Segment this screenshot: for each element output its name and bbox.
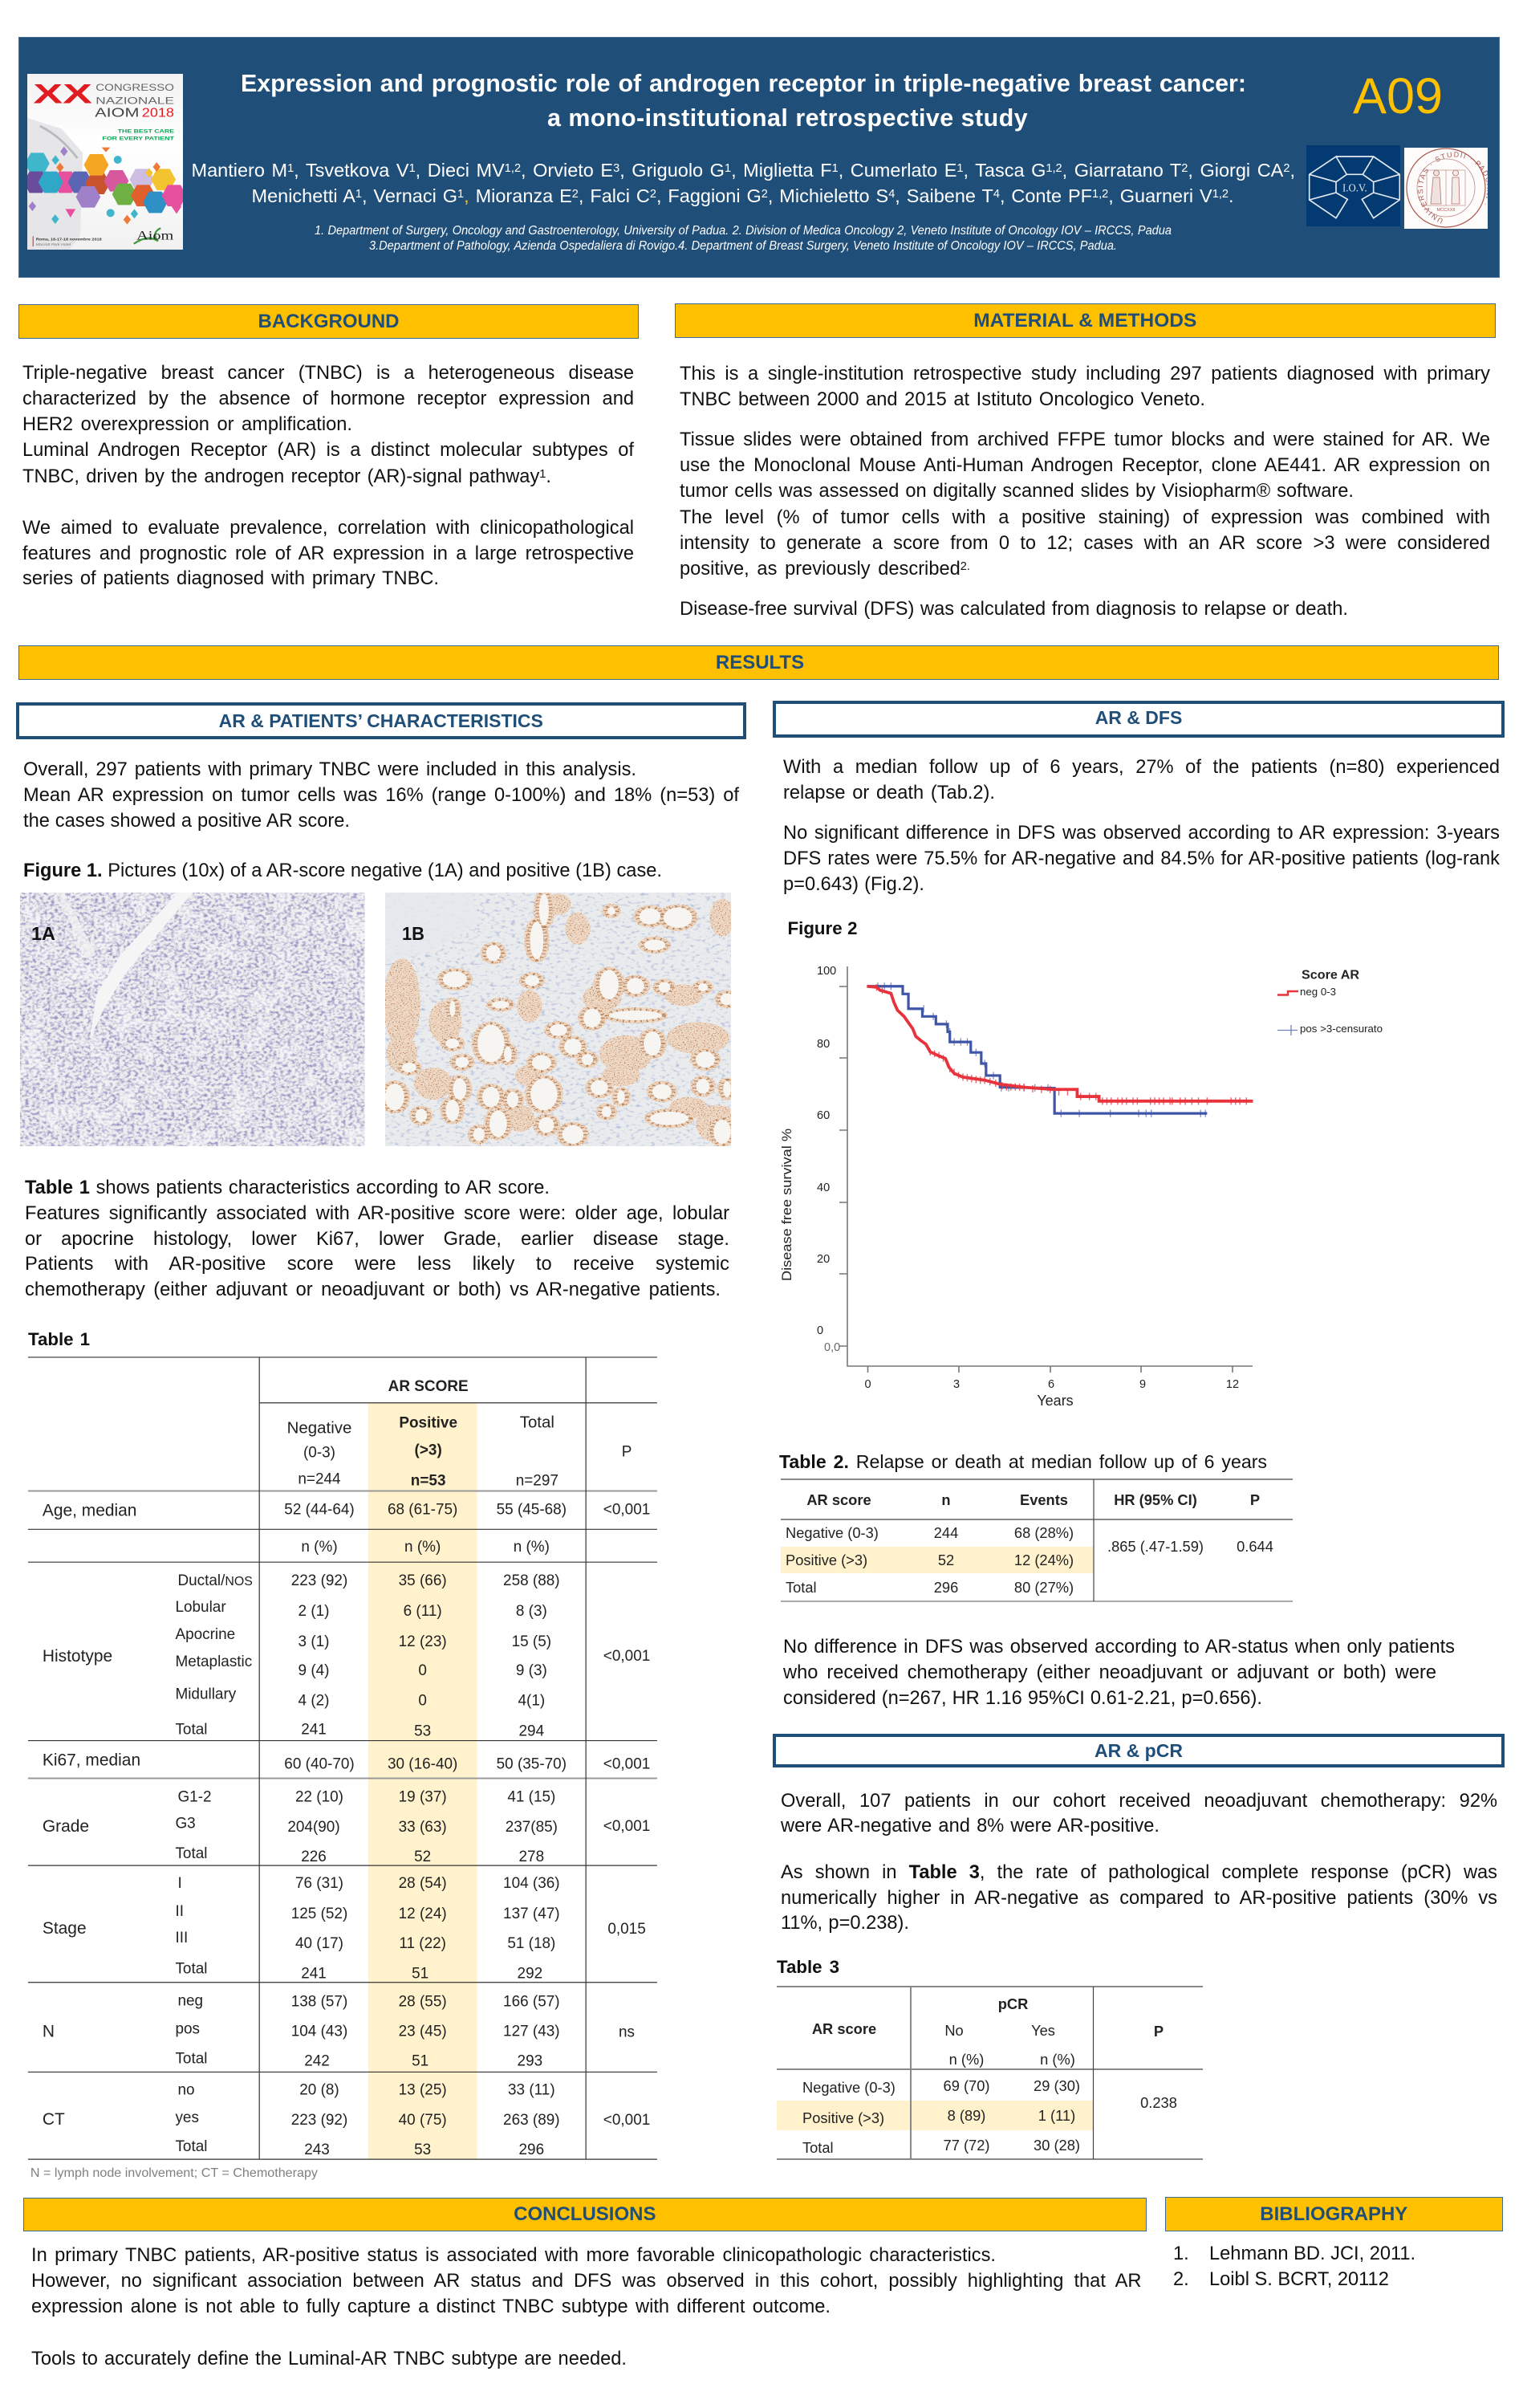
- rows: stage: 40 (17): [295, 1935, 343, 1952]
- text: DFS in chemotherapy subgroup: [783, 1636, 1454, 1709]
- logo: AIOM 2018 congress poster: [27, 74, 183, 250]
- rows: stage: 76 (31): [295, 1875, 343, 1892]
- text: material and methods: Disease-free survival (DFS) was calculated from diagnosis to relapse or death.: [680, 598, 1348, 620]
- rows: grade: [43, 1788, 650, 1865]
- table 2 rows: 12 (24%): [1014, 1552, 1074, 1568]
- table 3 rows: 69 (70): [944, 2077, 989, 2094]
- logo: AIOM 2018 congress poster: XX: [33, 79, 92, 110]
- rows: histotype: 12 (23): [399, 1633, 447, 1650]
- rows: stage: I: [177, 1875, 182, 1892]
- panel heading: AR and pCR: [773, 1734, 1505, 1767]
- rows: stage: 12 (24): [399, 1906, 447, 1922]
- rows: CT: [43, 2081, 650, 2158]
- text: patients overview: Figure 1. Pictures (10x) of a AR-score negative (1A) and positive (1B) case.: [23, 860, 662, 881]
- header row: n=297: [516, 1472, 558, 1489]
- rows: histotype: 53: [414, 1723, 431, 1740]
- rows: histotype: Apocrine: [175, 1626, 235, 1643]
- rows: stage: 292: [518, 1966, 542, 1983]
- rows: stage: Stage: [43, 1919, 87, 1938]
- heading: table 3: Table 3: [777, 1957, 839, 1977]
- rows: stage: [43, 1875, 646, 1983]
- rows: grade: 226: [301, 1849, 327, 1865]
- logo: AIOM 2018 congress poster: FOR EVERY PATIENT: [102, 136, 174, 141]
- text: bibliography: [1173, 2243, 1415, 2290]
- rows: N: 242: [304, 2052, 330, 2069]
- table 3 rows: 1 (11): [1038, 2107, 1075, 2124]
- table 3 header: [812, 1995, 1164, 2068]
- rows: stage: III: [175, 1930, 188, 1946]
- rows: grade: 204(90): [287, 1819, 340, 1836]
- y tick labels: 100: [817, 965, 836, 978]
- rows: grade: <0,001: [603, 1818, 650, 1835]
- table 2 rows: 80 (27%): [1014, 1579, 1074, 1596]
- rows: histotype: Lobular: [175, 1599, 226, 1616]
- heading bar: bibliography: [1165, 2197, 1503, 2231]
- text: background: characterized by the absence of hormone receptor expression and: [22, 388, 634, 409]
- text: AR and pCR: As shown in Table 3, the rate of pathological complete response (pCR) was: [781, 1861, 1497, 1883]
- rows: grade: Grade: [43, 1817, 89, 1836]
- rows: grade: G1-2: [177, 1788, 212, 1805]
- text: conclusions: [31, 2244, 1141, 2369]
- rows: histotype: 4 (2): [299, 1693, 329, 1710]
- text: AR and DFS: No significant difference in DFS was observed according to AR expression: 3-years: [783, 822, 1500, 844]
- table 3 header: pCR: [998, 1995, 1028, 2012]
- rows: histotype: 9 (3): [516, 1662, 547, 1679]
- rows: histotype: 3 (1): [299, 1633, 329, 1650]
- rows: stage: 51 (18): [507, 1935, 555, 1952]
- x tick labels: [864, 1378, 1239, 1391]
- heading: figure 2: Figure 2: [788, 918, 857, 938]
- rows: grade: 19 (37): [399, 1788, 447, 1805]
- header row: (>3): [415, 1442, 442, 1459]
- rows: stage: 51: [412, 1966, 428, 1983]
- label: 1A: 1A: [31, 923, 55, 944]
- table 3 rows: [802, 2077, 1177, 2156]
- table 3 header: P: [1154, 2023, 1164, 2040]
- rows: histotype: 223 (92): [291, 1572, 347, 1589]
- text: DFS in chemotherapy subgroup: considered (n=267, HR 1.16 95%CI 0.61-2.21, p=0.656).: [783, 1687, 1261, 1709]
- logo: AIOM 2018 congress poster: Roma, 16-17-18 novembre 2018: [36, 237, 102, 242]
- legend: pos >3-censurato: [1300, 1023, 1383, 1035]
- y tick labels: 40: [817, 1182, 830, 1194]
- logo: University of Padua seal: MCCXXII: [1437, 208, 1456, 213]
- row: units: n (%): [404, 1539, 441, 1556]
- rows: N: 23 (45): [399, 2024, 447, 2040]
- rows: N: 166 (57): [503, 1994, 560, 2011]
- rows: histotype: Metaplastic: [175, 1653, 252, 1670]
- text: table 1 summary: Patients with AR-positive score were less likely to receive systemic: [25, 1253, 729, 1275]
- table 2 rows: 52: [938, 1552, 954, 1568]
- text: conclusions: However, no significant association between AR status and DFS was observed in this cohort, possibly highlighting that AR: [31, 2270, 1141, 2292]
- x tick labels: 3: [953, 1378, 960, 1391]
- table 3: pCR by AR score: [777, 1986, 1203, 2160]
- rows: stage: 104 (36): [503, 1875, 560, 1892]
- logo: AIOM 2018 congress poster: THE BEST CARE: [118, 129, 175, 135]
- text: table 1 summary: chemotherapy (either adjuvant or neoadjuvant or both) vs AR-negative patients.: [25, 1279, 721, 1300]
- table 3 rows: Positive (>3): [802, 2109, 884, 2126]
- rows: histotype: Midullary: [175, 1686, 237, 1703]
- image 1B: AR-positive histology: [385, 893, 731, 1146]
- header row: Total: [520, 1413, 554, 1432]
- y tick labels: 0,0: [824, 1341, 840, 1354]
- text: material and methods: The level (% of tumor cells with a positive staining) of expression was combined with: [680, 506, 1490, 528]
- row: Ki67: [43, 1751, 650, 1772]
- row: age: 52 (44-64): [284, 1501, 355, 1518]
- table 3 rows: 29 (30): [1034, 2077, 1080, 2094]
- rows: stage: 137 (47): [503, 1906, 560, 1922]
- title: [241, 70, 1246, 132]
- table 2 rows: [786, 1524, 1273, 1596]
- table 2 header: Events: [1020, 1491, 1068, 1508]
- heading bar: material and methods: MATERIAL & METHODS: [973, 310, 1196, 331]
- panel heading: AR and DFS: [773, 701, 1505, 738]
- logo: IOV: I.O.V.: [1342, 182, 1367, 194]
- x axis title: Years: [1037, 1393, 1074, 1409]
- text: conclusions: expression alone is not able to fully capture a distinct TNBC subtype with different outcome.: [31, 2296, 831, 2317]
- x tick labels: 0: [864, 1378, 871, 1391]
- chart: Kaplan-Meier disease free survival by AR score: [779, 965, 1383, 1409]
- row: units: n (%): [301, 1539, 338, 1556]
- table 3 rows: 8 (89): [948, 2107, 985, 2124]
- table 3 header: n (%): [949, 2051, 984, 2068]
- rows: N: 293: [518, 2052, 542, 2069]
- table 2 rows: .865 (.47-1.59): [1107, 1538, 1204, 1555]
- rows: N: pos: [175, 2021, 200, 2038]
- heading bar: conclusions: CONCLUSIONS: [514, 2203, 656, 2225]
- table 2 rows: Negative (0-3): [786, 1524, 879, 1541]
- text: DFS in chemotherapy subgroup: who received chemotherapy (either neoadjuvant or adjuvant or both) were: [783, 1662, 1436, 1683]
- rows: N: neg: [177, 1993, 203, 2010]
- logo: AIOM 2018 congress poster: CONGRESSO: [95, 82, 174, 93]
- y tick labels: 80: [817, 1038, 830, 1051]
- row: age: Age, median: [43, 1501, 136, 1519]
- rows: CT: 243: [304, 2142, 330, 2158]
- rows: histotype: 0: [418, 1662, 427, 1679]
- affiliations: 3.Department of Pathology, Azienda Ospedaliera di Rovigo.4. Department of Breast Surgery, Veneto Institute of Oncology IOV – IRCCS, Padua.: [369, 239, 1117, 253]
- affiliations: [315, 224, 1172, 253]
- text: bibliography: Loibl S. BCRT, 20112: [1209, 2268, 1389, 2290]
- rows: CT: Total: [175, 2138, 207, 2155]
- rows: stage: 28 (54): [399, 1875, 447, 1892]
- header row: AR SCORE: [388, 1378, 469, 1395]
- rows: stage: 125 (52): [291, 1906, 347, 1922]
- text: AR and pCR: 11%, p=0.238).: [781, 1912, 909, 1934]
- table 2 rows: 244: [934, 1524, 958, 1541]
- header row: Positive: [399, 1415, 457, 1432]
- table 2 rows: 68 (28%): [1014, 1524, 1074, 1541]
- table 2 rows: Positive (>3): [786, 1552, 867, 1568]
- rows: histotype: 241: [301, 1722, 327, 1739]
- row: age: 55 (45-68): [497, 1501, 567, 1518]
- text: AR and pCR: [781, 1790, 1497, 1934]
- text: material and methods: use the Monoclonal Mouse Anti-Human Androgen Receptor, clone AE441. AR expression on: [680, 454, 1490, 476]
- table 2 header: n: [941, 1491, 951, 1508]
- rows: histotype: Ductal/NOS: [177, 1572, 253, 1589]
- logo: AIOM 2018 congress poster: 2018: [142, 107, 174, 120]
- rows: histotype: 258 (88): [503, 1572, 560, 1589]
- text: AR and pCR: numerically higher in AR-negative as compared to AR-positive patients (30% vs: [781, 1887, 1497, 1909]
- rows: histotype: 2 (1): [299, 1603, 329, 1620]
- rows: histotype: 35 (66): [399, 1572, 447, 1589]
- rows: CT: 13 (25): [399, 2081, 447, 2098]
- logo: IOV: [1306, 145, 1400, 226]
- text: table 1 summary: Features significantly associated with AR-positive score were: older age, lobular: [25, 1202, 729, 1224]
- rows: grade: 237(85): [506, 1819, 558, 1836]
- heading bar: results: RESULTS: [716, 652, 804, 673]
- rows: CT: 20 (8): [299, 2081, 339, 2098]
- rows: grade: 22 (10): [295, 1788, 343, 1805]
- row: Ki67: Ki67, median: [43, 1751, 140, 1769]
- row: Ki67: <0,001: [603, 1755, 650, 1772]
- table 2: relapse or death: [781, 1479, 1293, 1602]
- rows: histotype: <0,001: [603, 1648, 650, 1665]
- text: material and methods: positive, as previously described2.: [680, 558, 970, 580]
- logo: AIOM 2018 congress poster: Aiom: [136, 230, 174, 243]
- table 3 header: AR score: [812, 2020, 876, 2037]
- text: material and methods: This is a single-institution retrospective study including 297 patients diagnosed with primary: [680, 363, 1490, 384]
- row: age: [43, 1501, 650, 1519]
- panel heading: AR and DFS: AR & DFS: [1095, 706, 1182, 727]
- authors: [191, 160, 1295, 206]
- rows: CT: 33 (11): [508, 2081, 555, 2098]
- row: units: n (%): [514, 1539, 550, 1556]
- row: age: <0,001: [603, 1501, 650, 1518]
- table 2 header: HR (95% CI): [1114, 1491, 1197, 1508]
- rows: N: 138 (57): [291, 1994, 347, 2011]
- heading bar: conclusions: [23, 2198, 1147, 2231]
- logo: AIOM 2018 congress poster: Marriott Park Hotel: [36, 242, 71, 246]
- heading bar: background: [18, 304, 639, 339]
- rows: CT: 53: [414, 2142, 431, 2158]
- text: conclusions: Tools to accurately define the Luminal-AR TNBC subtype are needed.: [31, 2348, 627, 2369]
- text: bibliography: Lehmann BD. JCI, 2011.: [1209, 2243, 1415, 2264]
- text: patients overview: Mean AR expression on tumor cells was 16% (range 0-100%) and 18% (n=53) of: [23, 784, 739, 806]
- rows: CT: 296: [519, 2142, 544, 2158]
- rows: histotype: 0: [418, 1693, 427, 1710]
- table 3 rows: 0.238: [1140, 2094, 1177, 2111]
- text: bibliography: 1.: [1173, 2243, 1189, 2264]
- text: background: TNBC, driven by the androgen receptor (AR)-signal pathway1.: [22, 466, 551, 487]
- affiliations: 1. Department of Surgery, Oncology and Gastroenterology, University of Padua. 2. Division of Medica Oncology 2, Veneto Institute of Oncology IOV – IRCCS, Padua: [315, 224, 1172, 238]
- text: background: Triple-negative breast cancer (TNBC) is a heterogeneous disease: [22, 362, 634, 384]
- rows: histotype: 9 (4): [299, 1662, 329, 1679]
- rows: histotype: 8 (3): [516, 1603, 547, 1620]
- authors: Mantiero M1, Tsvetkova V1, Dieci MV1,2, Orvieto E3, Griguolo G1, Miglietta F1, Cumerlato E1, Tasca G1,2, Giarratano T2, Giorgi CA2,: [191, 160, 1295, 181]
- text: AR and pCR: Overall, 107 patients in our cohort received neoadjuvant chemotherapy: 92%: [781, 1790, 1497, 1812]
- text: background: series of patients diagnosed with primary TNBC.: [22, 567, 439, 589]
- table 2 rows: 0.644: [1237, 1538, 1273, 1555]
- text: AR and DFS: [783, 756, 1500, 895]
- logo: AIOM 2018 congress poster: NAZIONALE: [95, 95, 174, 106]
- text: patients overview: the cases showed a positive AR score.: [23, 810, 350, 832]
- text: bibliography: 2.: [1173, 2268, 1189, 2290]
- rows: grade: 33 (63): [399, 1819, 447, 1836]
- table 3 rows: Negative (0-3): [802, 2079, 896, 2096]
- text: background: Luminal Androgen Receptor (AR) is a distinct molecular subtypes of: [22, 439, 634, 461]
- rows: N: N: [43, 2023, 55, 2041]
- table 1: patient characteristics by AR score: [27, 1357, 657, 2180]
- header row: (0-3): [303, 1445, 335, 1462]
- image 1A: AR-negative histology: [20, 893, 364, 1146]
- rows: CT: 223 (92): [291, 2112, 347, 2129]
- row: units: [301, 1539, 550, 1556]
- authors: Menichetti A1, Vernaci G1, Mioranza E2, Falci C2, Faggioni G2, Michieletto S4, Saibene T4, Conte PF1,2, Guarneri V1,2.: [252, 185, 1234, 206]
- panel heading: AR and pCR: AR & pCR: [1095, 1740, 1183, 1761]
- text: AR and pCR: were AR-negative and 8% were AR-positive.: [781, 1815, 1160, 1837]
- table 3 rows: Total: [802, 2139, 834, 2156]
- text: background: features and prognostic role of AR expression in a large retrospective: [22, 543, 634, 564]
- rows: N: 51: [412, 2052, 428, 2069]
- label: 1B: 1B: [401, 923, 424, 944]
- rows: histotype: Total: [175, 1722, 207, 1739]
- text: conclusions: In primary TNBC patients, AR-positive status is associated with more favorable clinicopathologic characteristics.: [31, 2244, 996, 2266]
- footnote: N = lymph node involvement; CT = Chemotherapy: [30, 2166, 318, 2180]
- rows: grade: G3: [175, 1815, 196, 1832]
- rows: histotype: 4(1): [518, 1693, 545, 1710]
- text: DFS in chemotherapy subgroup: No difference in DFS was observed according to AR-status when only patients: [783, 1636, 1454, 1658]
- panel heading: AR and patients characteristics: AR & PATIENTS’ CHARACTERISTICS: [219, 710, 543, 730]
- legend: [1277, 968, 1383, 1035]
- rows: N: Total: [175, 2050, 207, 2067]
- text: background: HER2 overexpression or amplification.: [22, 413, 352, 435]
- x tick labels: 12: [1226, 1378, 1239, 1391]
- x tick labels: 6: [1048, 1378, 1054, 1391]
- text: table 1 summary: Table 1 shows patients characteristics according to AR score.: [25, 1177, 550, 1198]
- text: patients overview: [23, 759, 739, 881]
- table 3 header: Yes: [1031, 2022, 1055, 2039]
- text: background: We aimed to evaluate prevalence, correlation with clinicopathological: [22, 517, 634, 539]
- table 2 header: AR score: [806, 1491, 871, 1508]
- text: table 1 summary: [25, 1177, 729, 1300]
- rows: stage: II: [175, 1903, 184, 1920]
- rows: stage: 0,015: [607, 1921, 646, 1938]
- rows: CT: CT: [43, 2110, 65, 2129]
- row: Ki67: 50 (35-70): [497, 1755, 567, 1772]
- heading bar: background: BACKGROUND: [258, 310, 400, 332]
- rows: N: ns: [619, 2024, 635, 2041]
- rows: grade: Total: [175, 1845, 207, 1862]
- rows: grade: 52: [414, 1849, 431, 1865]
- y tick labels: 20: [817, 1253, 830, 1266]
- legend: Score AR: [1302, 968, 1359, 982]
- table 2 rows: Total: [786, 1579, 817, 1596]
- rows: histotype: Histotype: [43, 1647, 112, 1666]
- rows: CT: no: [177, 2081, 195, 2098]
- x tick labels: 9: [1139, 1378, 1146, 1391]
- curve: AR negative: [867, 984, 1253, 1104]
- rows: stage: Total: [175, 1961, 207, 1978]
- table 2 header: P: [1250, 1491, 1260, 1508]
- header row: Negative: [287, 1419, 351, 1438]
- row: age: 68 (61-75): [388, 1501, 457, 1518]
- rows: CT: yes: [175, 2109, 199, 2126]
- text: table 1 summary: or apocrine histology, lower Ki67, lower Grade, earlier disease stage.: [25, 1228, 729, 1250]
- rows: stage: 11 (22): [399, 1935, 446, 1952]
- heading bar: material and methods: [675, 303, 1496, 338]
- text: AR and DFS: DFS rates were 75.5% for AR-negative and 84.5% for AR-positive patients (log-rank: [783, 848, 1500, 869]
- panel heading: AR and patients characteristics: [16, 702, 746, 739]
- axes: [839, 966, 1253, 1373]
- y tick labels: 60: [817, 1109, 830, 1122]
- row: Ki67: 60 (40-70): [284, 1755, 355, 1772]
- header row: n=53: [411, 1472, 446, 1489]
- rows: N: 127 (43): [503, 2024, 560, 2040]
- header row: n=244: [298, 1470, 341, 1487]
- y axis title: Disease free survival %: [779, 1129, 794, 1281]
- rows: histotype: 294: [519, 1723, 544, 1740]
- rows: histotype: [43, 1572, 650, 1740]
- header row: P: [622, 1444, 632, 1461]
- heading bar: results: [18, 645, 1499, 680]
- text: material and methods: TNBC between 2000 and 2015 at Istituto Oncologico Veneto.: [680, 388, 1205, 410]
- table 3 rows: 30 (28): [1034, 2137, 1080, 2154]
- logo: AIOM 2018 congress poster: AIOM: [95, 107, 139, 120]
- table 2 title: Table 2. Relapse or death at median follow up of 6 years: [779, 1451, 1267, 1472]
- rows: stage: 241: [301, 1966, 327, 1983]
- rows: N: [43, 1993, 635, 2069]
- table 2 header: [806, 1491, 1260, 1508]
- table 2 rows: 296: [934, 1579, 958, 1596]
- title: Expression and prognostic role of androgen receptor in triple-negative breast cancer:: [241, 70, 1246, 97]
- rows: grade: 278: [519, 1849, 544, 1865]
- table 3 header: No: [944, 2022, 964, 2039]
- rows: histotype: 15 (5): [512, 1633, 551, 1650]
- text: AR and DFS: p=0.643) (Fig.2).: [783, 873, 924, 895]
- rows: N: 28 (55): [399, 1994, 447, 2011]
- y tick labels: [817, 965, 840, 1354]
- table 3 header: n (%): [1040, 2051, 1075, 2068]
- text: material and methods: intensity to generate a score from 0 to 12; cases with an AR score >3 were considered: [680, 532, 1490, 554]
- heading bar: bibliography: BIBLIOGRAPHY: [1260, 2203, 1407, 2225]
- rows: grade: 41 (15): [507, 1788, 555, 1805]
- text: material and methods: tumor cells was assessed on digitally scanned slides by Visiopharm® software.: [680, 480, 1354, 502]
- row: Ki67: 30 (16-40): [388, 1755, 457, 1772]
- rows: CT: 263 (89): [503, 2112, 560, 2129]
- curve: AR positive: [867, 982, 1207, 1117]
- text: background: [22, 362, 634, 589]
- text: material and methods: [680, 363, 1490, 620]
- header row: [287, 1378, 632, 1489]
- rows: N: 104 (43): [291, 2024, 347, 2040]
- y tick labels: 0: [817, 1324, 823, 1337]
- poster code A09: A09: [1353, 68, 1443, 124]
- text: AR and DFS: relapse or death (Tab.2).: [783, 782, 995, 803]
- text: patients overview: Overall, 297 patients with primary TNBC were included in this analysis.: [23, 759, 636, 780]
- header banner: [18, 37, 1500, 278]
- rows: histotype: 6 (11): [404, 1603, 442, 1620]
- rows: CT: <0,001: [603, 2112, 650, 2129]
- title: a mono-institutional retrospective study: [547, 104, 1028, 132]
- table 3 rows: 77 (72): [944, 2137, 989, 2154]
- text: material and methods: Tissue slides were obtained from archived FFPE tumor blocks and were stained for AR. We: [680, 429, 1490, 450]
- legend: neg 0-3: [1300, 986, 1336, 998]
- text: AR and DFS: With a median follow up of 6 years, 27% of the patients (n=80) experienced: [783, 756, 1500, 778]
- heading: table 1: Table 1: [28, 1329, 90, 1349]
- rows: CT: 40 (75): [399, 2112, 447, 2129]
